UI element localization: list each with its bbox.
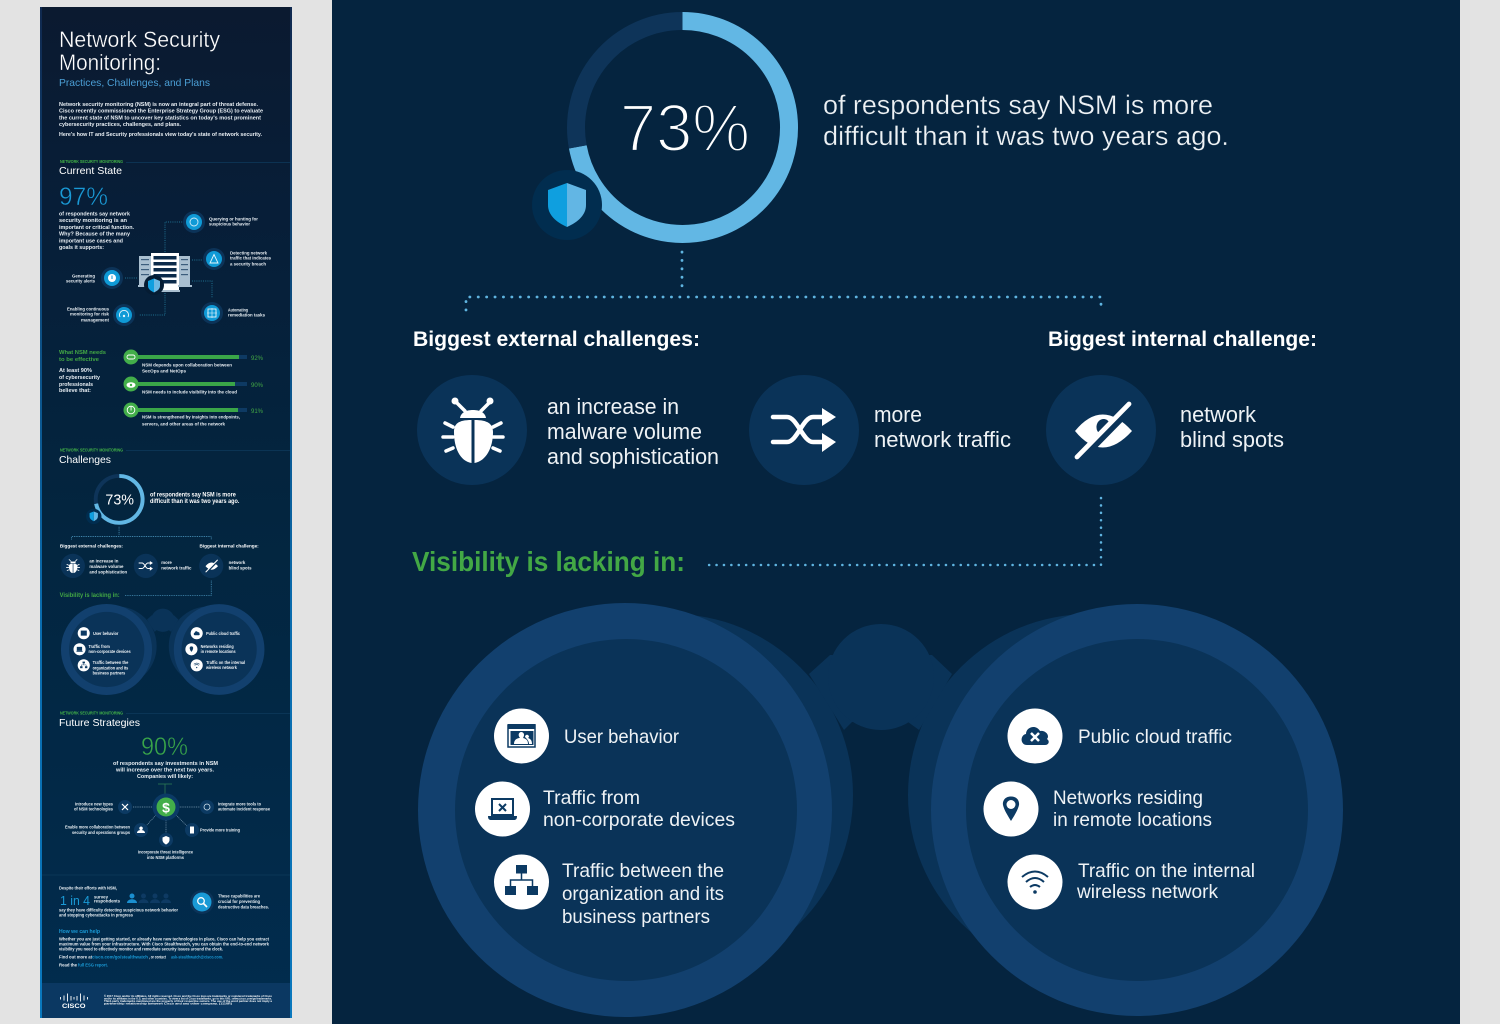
icon: server stack — [138, 253, 192, 295]
use case labels: Enabling continuous — [67, 306, 110, 312]
miniature challenges section: Biggest external challenges: — [60, 543, 123, 549]
dotted connector to visibility — [709, 498, 1101, 565]
use case labels: traffic that indicates — [230, 256, 272, 260]
visibility item: non-corporate devices: non-corporate devices — [543, 809, 735, 831]
use case labels: security alerts — [66, 278, 96, 284]
visibility item: wireless network: Traffic on the internal — [1078, 860, 1255, 882]
use case labels: Automating — [228, 308, 248, 312]
miniature challenges section — [60, 476, 264, 695]
section label: current state: NETWORK SECURITY MONITORING — [60, 159, 123, 164]
section label: challenges: Challenges — [59, 454, 111, 466]
visibility item: business partners: organization and its — [562, 883, 724, 905]
icon: crossed eye — [1046, 375, 1156, 485]
bar chart: NSM needs: 92% — [251, 356, 264, 362]
miniature challenges section: in remote locations — [201, 649, 236, 654]
thumbnail title: Network Security — [59, 27, 220, 52]
challenge text: malware: an increase in — [547, 394, 679, 419]
visibility item: business partners — [562, 860, 724, 928]
challenge text: traffic: network traffic — [874, 427, 1011, 452]
stat: 97%: 97% — [59, 183, 108, 211]
donut chart: 73%: 73% — [620, 91, 750, 166]
miniature challenges section: organization and its — [93, 665, 129, 670]
use case labels: a security breach — [230, 262, 266, 266]
magnifier note: crucial for preventing — [218, 899, 260, 904]
donut chart: 73% — [576, 21, 789, 234]
stat: 1 in 4 respondents: survey — [94, 894, 109, 900]
visibility item: business partners: Traffic between the — [562, 860, 724, 882]
how we can help: maximum value from your infrastructure. With Cisco Stealthwatch, you can obtain the end-to-end network — [59, 942, 270, 946]
thumbnail intro text: cybersecurity practices, challenges, and plans. — [59, 122, 182, 128]
challenge text: malware — [547, 394, 719, 469]
miniature challenges section: an increase in — [89, 558, 118, 564]
miniature challenges section: difficult than it was two years ago. — [150, 499, 240, 505]
what NSM needs text: of cybersecurity — [59, 375, 100, 381]
how we can help: How we can help — [59, 929, 100, 935]
bar chart: NSM needs: 90% — [251, 383, 264, 389]
bar chart: NSM needs: 91% — [251, 409, 264, 415]
how we can help: Whether you are just getting started, or already have new technologies in place, Cisco can help you extract — [59, 936, 269, 942]
icon: shuffle arrows — [749, 375, 859, 485]
icon: organization chart — [494, 854, 549, 910]
how we can help — [59, 929, 270, 968]
section label: future strategies: NETWORK SECURITY MONITORING — [60, 710, 123, 716]
miniature challenges section: Traffic on the internal — [206, 660, 245, 665]
bar chart: NSM needs: SecOps and NetOps — [142, 368, 187, 374]
bar chart: NSM needs: NSM needs to include visibility into the cloud — [142, 390, 237, 394]
stat description — [59, 212, 135, 251]
use case labels: remediation tasks — [228, 312, 266, 318]
stat description: goals it supports: — [59, 245, 104, 251]
section: current state — [59, 159, 290, 426]
use case labels: Detecting network — [230, 250, 268, 256]
miniature challenges section: malware volume — [89, 564, 124, 570]
visibility item: public cloud: Public cloud traffic — [1078, 726, 1232, 748]
section label: future strategies: Future Strategies — [59, 717, 140, 729]
miniature challenges section: blind spots — [229, 566, 252, 572]
icon: generating alerts — [101, 267, 123, 289]
strategy labels: Incorporate threat intelligence — [138, 850, 193, 854]
heading: internal challenge: Biggest internal challenge: — [1048, 327, 1317, 351]
miniature challenges section: of respondents say NSM is more — [150, 492, 237, 498]
stat description: important use cases and — [59, 238, 123, 244]
how we can help: ask-stealthwatch@cisco.com. — [171, 954, 223, 960]
miniature challenges section: non-corporate devices — [88, 649, 131, 654]
icon: querying — [183, 211, 205, 233]
how we can help: Find out more at — [59, 954, 93, 960]
stat description: of respondents say investments in NSM — [113, 761, 218, 767]
thumbnail title: Practices, Challenges, and Plans — [59, 78, 210, 89]
icon: bug — [417, 375, 527, 485]
use case labels — [66, 216, 272, 322]
legal text: Third-party trademarks mentioned are the property of their respective owners. The use of the word partner does not imply a — [104, 999, 272, 1003]
challenge text: blind spots: blind spots — [1180, 427, 1284, 452]
section label: challenges: NETWORK SECURITY MONITORING — [60, 448, 123, 452]
miniature challenges section: business partners — [93, 670, 126, 675]
visibility item: wireless network: wireless network — [1076, 881, 1218, 903]
use case labels: suspicious behavior — [209, 222, 250, 226]
legal text: © 2017 Cisco and/or its affiliates. All rights reserved. Cisco and the Cisco logo are trademarks or registered trademarks of Cisco — [104, 994, 272, 998]
stat: 1 in 4 respondents: respondents — [94, 898, 121, 904]
challenge text: malware: malware volume — [547, 419, 702, 444]
thumbnail intro text: Network security monitoring (NSM) is now an integral part of threat defense. — [59, 102, 259, 108]
thumbnail intro text — [59, 102, 263, 138]
stat description: of respondents say NSM is more — [823, 90, 1213, 120]
bar chart: NSM needs — [124, 350, 264, 426]
challenge text: malware: and sophistication — [547, 444, 719, 469]
strategy labels: automate incident response — [218, 806, 270, 812]
use case labels: monitoring for risk — [70, 312, 110, 316]
icon: wifi — [1008, 854, 1062, 910]
how we can help: Read the — [59, 962, 78, 968]
legal text: and/or its affiliates in the U.S. and other countries. To view a list of Cisco trademarks, go to this URL: www.cisco.com/go/trademarks. — [104, 996, 272, 1000]
stat: 1 in 4 respondents: Despite their efforts with NSM, — [59, 886, 117, 890]
what NSM needs text — [59, 350, 106, 394]
icon: automating — [201, 302, 223, 324]
what NSM needs text: to be effective — [59, 357, 99, 363]
stat: 1 in 4 respondents — [59, 886, 178, 918]
stat: 1 in 4 respondents: 1 in 4 — [60, 893, 90, 908]
miniature challenges section: User behavior — [93, 631, 119, 636]
stat description — [113, 761, 218, 780]
heading: external challenges: Biggest external challenges: — [413, 327, 700, 351]
challenge text: traffic: more — [874, 402, 922, 427]
bar chart: NSM needs: NSM depends upon collaboration between — [142, 362, 232, 368]
how we can help: full ESG report. — [78, 962, 108, 968]
visibility item: remote locations — [1053, 787, 1212, 831]
panel: thumbnail overview of full infographic — [40, 7, 292, 1018]
miniature challenges section: network traffic — [161, 566, 192, 572]
strategy labels: of NSM technologies — [74, 806, 113, 812]
binoculars graphic — [418, 603, 1343, 1017]
how we can help: visibility you need to effectively monitor and remediate security issues around the clock. — [59, 946, 223, 952]
magnifier note: destructive data breaches. — [218, 904, 269, 910]
stat description — [823, 90, 1229, 151]
magnifier note — [218, 894, 269, 910]
miniature challenges section: Networks residing — [201, 644, 234, 649]
icon: magnifier — [190, 890, 214, 914]
thumbnail intro text: Here's how IT and Security professionals view today's state of network security. — [59, 132, 263, 138]
strategy labels: Introduce new types — [75, 802, 113, 806]
miniature challenges section: Traffic between the — [93, 660, 129, 665]
miniature challenges section: more — [161, 560, 172, 566]
stat description: of respondents say network — [59, 212, 130, 218]
what NSM needs text: professionals — [59, 382, 93, 388]
strategy labels: into NSM platforms — [147, 855, 185, 860]
challenge text: blind spots — [1180, 402, 1284, 452]
bar chart: NSM needs: servers, and other areas of the network — [142, 422, 226, 426]
footer band — [42, 983, 290, 1018]
strategy labels: Enable more collaboration between — [65, 824, 130, 830]
section label: current state: Current State — [59, 165, 122, 177]
stat description: Why? Because of the many — [59, 232, 130, 238]
visibility item: user behavior: User behavior — [564, 726, 679, 748]
section label: future strategies — [59, 710, 290, 729]
bar chart: NSM needs: NSM is strengthened by insights into endpoints, — [142, 414, 240, 420]
use case labels: management — [81, 318, 110, 322]
miniature challenges section: and sophistication — [89, 569, 127, 575]
use case labels: Querying or hunting for — [209, 216, 258, 222]
stat description: difficult than it was two years ago. — [823, 121, 1229, 151]
visibility item: remote locations: Networks residing — [1053, 787, 1203, 809]
cisco logo — [60, 994, 88, 1010]
stat: 1 in 4 respondents: and stopping cyberattacks in progress — [59, 912, 134, 918]
use case labels: Generating — [72, 274, 95, 278]
panel: main zoomed challenges section — [332, 0, 1460, 1024]
miniature challenges section: 73% — [105, 492, 134, 509]
how we can help: cisco.com/go/stealthwatch — [92, 954, 148, 960]
section label: current state — [59, 159, 290, 177]
strategy labels: Provide more training — [200, 828, 240, 832]
strategy labels: Integrate more tools to — [218, 802, 261, 806]
icon: detecting — [203, 248, 225, 270]
visibility item: business partners: business partners — [562, 906, 710, 928]
miniature challenges section: network — [229, 560, 246, 566]
stat: 1 in 4 respondents: say they have difficulty detecting suspicious network behavior — [59, 908, 178, 912]
stat description: will increase over the next two years. — [115, 768, 215, 774]
strategy labels: security and operations groups — [72, 830, 130, 835]
stat description: important or critical function. — [59, 225, 135, 231]
connector lines — [125, 222, 212, 315]
icon: user behavior — [494, 708, 549, 764]
visibility item: remote locations: in remote locations — [1053, 809, 1212, 831]
icon: shield — [532, 170, 602, 240]
how we can help: , or contact — [149, 954, 166, 960]
what NSM needs text: At least 90% — [59, 368, 92, 374]
thumbnail title — [59, 27, 220, 89]
visibility item: non-corporate devices — [543, 787, 735, 831]
heading: visibility: Visibility is lacking in: — [412, 546, 685, 577]
visibility item: non-corporate devices: Traffic from — [543, 787, 640, 809]
section: future strategies — [59, 710, 290, 860]
thumbnail intro text: the current state of NSM to uncover key statistics on today's most prominent — [59, 115, 261, 121]
magnifier note: These capabilities are — [218, 894, 261, 898]
stat description: security monitoring is an — [59, 218, 127, 224]
icon: monitoring — [113, 304, 135, 326]
cisco logo: CISCO — [62, 1003, 86, 1010]
stat: 90%: 90% — [141, 733, 188, 761]
miniature challenges section: Public cloud traffic — [206, 631, 241, 636]
stat description: Companies will likely: — [137, 774, 193, 780]
challenge text: traffic — [874, 402, 1011, 452]
thumbnail title: Monitoring: — [59, 50, 161, 75]
icon: cloud — [1008, 708, 1062, 764]
strategy hub diagram — [118, 784, 214, 847]
dotted connectors from donut — [466, 252, 1101, 310]
miniature challenges section: Visibility is lacking in: — [60, 592, 120, 599]
strategy labels — [65, 802, 270, 860]
icon: laptop — [475, 782, 530, 836]
miniature challenges section: Biggest internal challenge: — [200, 543, 259, 549]
section label: challenges — [59, 448, 290, 466]
visibility item: wireless network — [1076, 860, 1255, 903]
icon: location pin — [984, 782, 1038, 836]
challenge text: blind spots: network — [1180, 402, 1257, 427]
thumbnail intro text: Cisco recently commissioned the Enterprise Strategy Group (ESG) to evaluate — [59, 109, 263, 115]
legal text — [104, 994, 272, 1006]
what NSM needs text: What NSM needs — [59, 350, 106, 356]
miniature challenges section: Traffic from — [88, 644, 110, 649]
legal text: partnership relationship between Cisco and any other company. (1110R) — [104, 1002, 232, 1006]
strategy hub diagram: $ — [162, 800, 170, 816]
what NSM needs text: believe that: — [59, 388, 91, 394]
miniature challenges section: wireless network — [205, 665, 238, 670]
